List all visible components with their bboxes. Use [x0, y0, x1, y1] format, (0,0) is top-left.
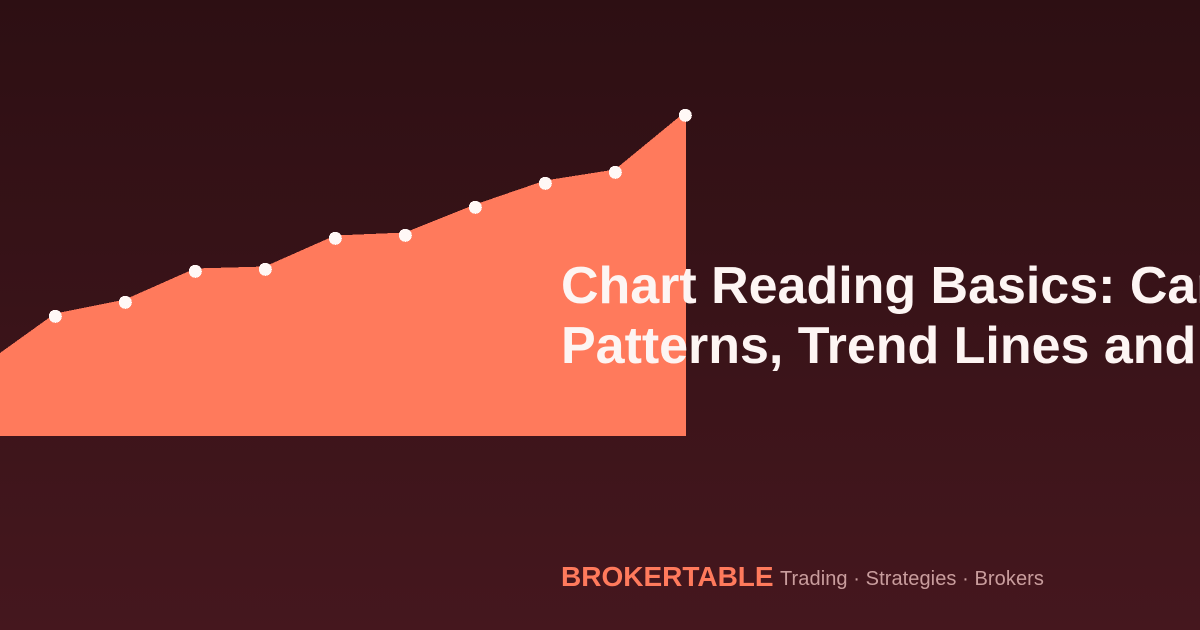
tagline: Trading · Strategies · Brokers: [780, 568, 1044, 590]
footer: [561, 561, 1044, 592]
chart area fill: [0, 112, 686, 436]
data points: [49, 109, 692, 323]
title: [561, 257, 1200, 375]
brand name: BROKERTABLE: [561, 561, 774, 592]
